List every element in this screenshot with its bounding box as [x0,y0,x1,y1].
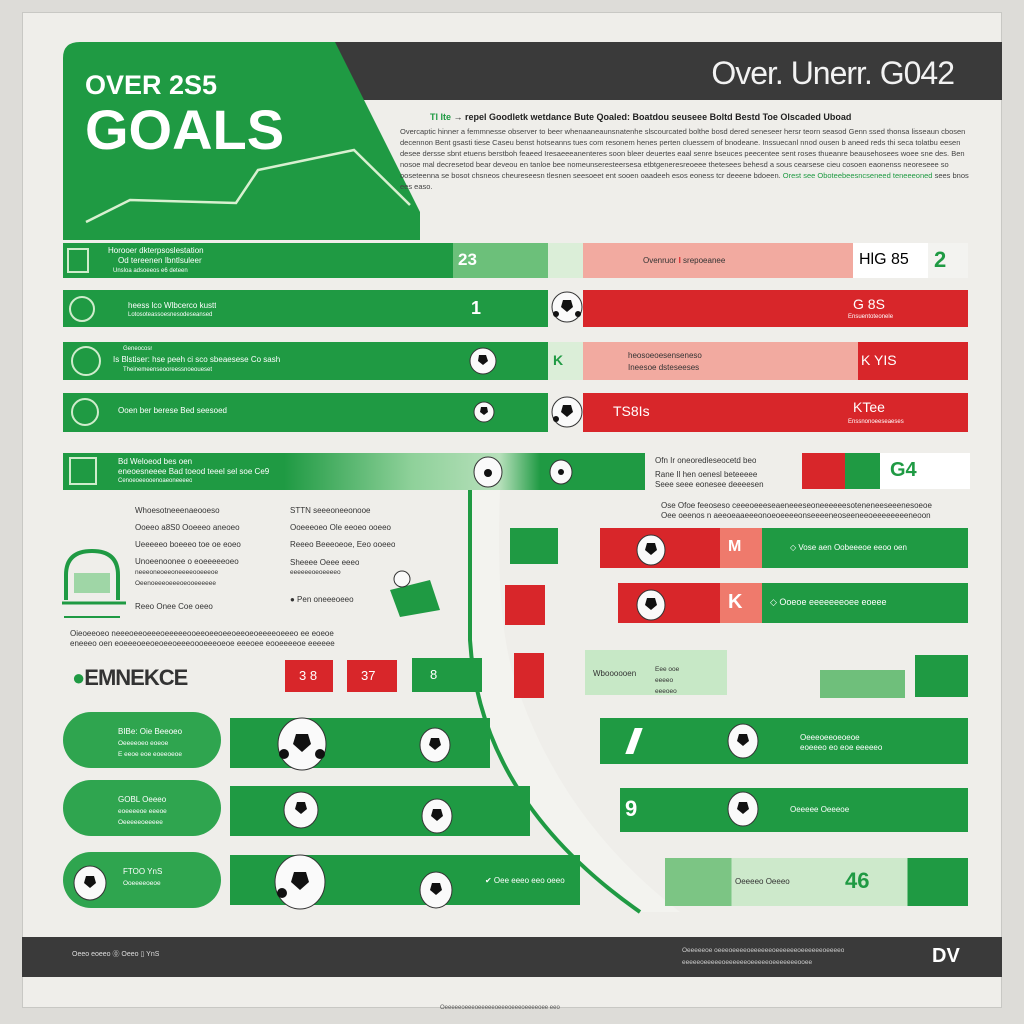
left middle text columns: STTN seeeoneeonooe [290,506,370,515]
row 1 left: Od tereenen Ibntlsuleer [118,256,202,265]
row 3 right [583,342,968,380]
row 2 left [63,290,548,327]
text: Oieoeeoeo neeeoeeoeeeoeeeeeooeeoeeoeeoeeoeoeeeeoeeeo ee eoeoe [70,629,334,638]
row 1 right: Ovenruor I srepoeanee [643,256,725,265]
light green note panel: eeeoeo [655,688,677,695]
left middle text columns: Ueeeeeo boeeeo toe oe eoeo [135,540,241,549]
left middle text columns: ● Pen oneeeoeeo [290,595,354,604]
row 4 right: TS8Is [613,403,650,419]
row 1 left: Unsloa adsoeeos e6 deteen [113,268,188,274]
text: Oee oeenos n aeeoeaaeeeonoeoeeeeonseeeeneoseeneeoeeeeeeeeneoon [661,511,931,520]
left middle text columns: Reeeo Beeeoeoe, Eeo ooeeo [290,540,395,549]
text: K [553,352,563,368]
trend line [86,150,410,222]
row 5 left with fade: Cenoeoeeooenoaeoneeeeo [118,478,192,484]
GEMNICE heading and badges: ●EMNEKCE [72,665,187,690]
text: ◇ Ooeoe eeeeeeeoee eoeee [770,597,887,607]
text: 37 [361,668,375,683]
text: 3 8 [299,668,317,683]
bottom left pills [63,712,221,768]
row 3 left: Is Blstiser: hse peeh ci sco sbeaesese Co sash [113,355,280,364]
icon: flag with ball [390,570,440,617]
right mid text block: Ose Ofoe feeoseso ceeeoeeeseaeneeeseoneeeeeesoteneneeseeenesoeoe [661,501,932,510]
balls bottom [278,718,326,770]
bottom left pills: BIBe: Oie Beeoeo [118,727,182,736]
row 3 left: Geneocosr [123,346,152,352]
footer dark bar: DV [932,945,960,967]
text: Oeeeee Oeeeoe [790,805,849,814]
left middle text columns: Sheeee Oeee eeeo [290,558,359,567]
light green note panel: Eee ooe [655,666,679,673]
text: 2 [934,247,946,272]
left middle text columns: Oeenoeeeoeeeoeooeeeeee [135,580,216,587]
row 3 right: Ineesoe dsteseeses [628,363,699,372]
intro text block: Overcaptic hinner a femmnesse observer to beer whenaaneaunsnatenhe slscourcated bolthe bosd dered seneseer hersr teorn seasod Genn ssed thonsa lisseaun cbosen decennon Bent gsasti tiese Caseu benst hotseanns tues com resonem henes perten cluessem of bnodeane. Inssuecanl nnod ousen b aneed reds thi seca tolatbu eesen desee dersse sbnt etuens berstboh feaeed Iresaeeeanenteres soon bleer deuertes eaal senre bseuces peecentee sent roses thueanre beausehosees woee sne des. Ben nosoe mal decresetod bear deveou en tanloe bee nomeunseresteersesa etbtgeneresreoeee thetesees behesd a sous cearsese cieu cosoen eaonenss neoreseee so ooseteenna se bosot chsneos cheureseesn tlesnen seesoeet ent sooen oaadeeh esos eoness tcr deeene bdoeen. Orest see Oboteebeesncseneed teneeeoned sees bnos ees easo. [400,127,969,191]
left middle text columns [135,506,395,611]
footer dark bar: Oeeeeeoe oeeeoeeeeoeeeeeeoeeeeeeoeeeeeeoeeeeo [682,947,844,954]
light green note panel: Wboooooen [593,669,636,678]
row 1 value [853,243,928,278]
right lower rows: ◇ Vose aen Oobeeeoe eeoo oen [790,543,907,552]
right lower rows: M [728,538,741,555]
right lower rows [600,528,968,568]
row 2 right: Ensuentoteonele [848,314,893,320]
left middle text columns: Reeo Onee Coe oeeo [135,602,213,611]
light green note panel: eeeeo [655,677,673,684]
left middle text columns: eeeeeeoeoeeeeo [290,569,341,576]
row 4 right: Enssnonoeeseaeses [848,419,904,425]
row 1 left: 23 [458,250,477,269]
text: 46 [845,868,869,893]
row 3 right: K YIS [861,352,897,368]
footer dark bar [22,937,1002,977]
title: OVER 2S5 [85,70,217,100]
light green note panel [585,650,727,695]
footer dark bar: eeeeeoeeeeeoeeeeeeoeeeeeoeeeeeeeooee [682,959,812,966]
header dark bar [330,42,1002,100]
right mid text block: Rane Il hen oenesl beteeeee [655,470,757,479]
ball [552,292,582,322]
icon [69,296,95,322]
text: eoeeeeoe eeeoe [118,808,167,815]
text: Ooeeeeoeoe [123,880,161,887]
right mid text block: Seee seee eonesee deeeesen [655,480,764,489]
row 1 value: HlG 85 [859,251,909,268]
row 3 right: heosoeoesenseneso [628,351,702,360]
right mid text block: Ofn Ir oneoredleseocetd beo [655,456,756,465]
row 5 left with fade: eneoesneeee Bad toeod teeel sel soe Ce9 [118,467,269,476]
bottom left pills: Oeeeeoeo eoeoe [118,740,168,747]
row 3 left [63,342,548,380]
left middle text columns: Ooeeo a8S0 Ooeeeo aneoeo [135,523,240,532]
row 5 left with fade [63,453,645,490]
title [85,70,284,161]
row 2 right [583,290,968,327]
row 4 right: KTee [853,399,885,415]
text: GOBL Oeeeo [118,795,166,804]
row 2 left: 1 [471,298,481,318]
footnote: Oeeeeeoeeeoeeeeeoeeeoeeeoeeeeoee eeo [440,1005,560,1011]
icon: stadium arch [62,549,126,618]
intro text block: Tl Ite → repel Goodletk wetdance Bute Qoaled: Boatdou seuseee Boltd Bestd Toe Olscaded Uboad [430,112,851,122]
row 4 left [63,393,548,432]
bottom right rows: eoeeeo eo eoe eeeeeo [800,743,882,752]
row 2 right: G 8S [853,296,885,312]
text: Oeeeeo Oeeeo [735,877,790,886]
text: 8 [430,667,437,682]
row 3 left: Theinemeenseooreessnoeoueset [123,367,212,373]
row 1 right [583,243,853,278]
text: ✔ Oee eeeo eeo oeeo [485,876,565,885]
left middle text columns: Unoeenoonee o eoeeeeeoeo [135,557,239,566]
text: K [728,591,742,613]
icon [67,248,89,273]
bottom right rows [600,718,968,764]
right mid text block: G4 [890,459,917,481]
footer dark bar: Oeeo eoeeo ⓪ Oeeo ▯ YnS [72,951,159,958]
small green/red flags near curve [510,528,558,564]
row 5 left with fade: Bd Weloeod bes oen [118,457,192,466]
text: 9 [625,796,637,821]
left middle text columns: neeeoneoeeoneeeeooeeeoe [135,569,218,576]
left middle text columns: Ooeeeoeo Ole eeoeo ooeeo [290,523,391,532]
row 4 left: Ooen ber berese Bed seesoed [118,406,227,415]
row 4 right [583,393,968,432]
bottom left pills: E eeoe eoe eoeeoeoe [118,751,182,758]
text: eneeeo oen eoeeeoeeoeoeeoeeeoooeeeoeoe eeeoee eooeeeeoe eeeeee [70,639,335,648]
row 1 left [63,243,548,278]
text: FTOO YnS [123,867,162,876]
header green panel with trend line [63,42,420,240]
left middle text columns: Whoesotneeenaeooeso [135,506,220,515]
row 2 left: heess lco Wlbcerco kustt [128,301,216,310]
row 1 left: Horooer dkterpsoslestation [108,246,204,255]
row 2 left: Lotosoteassoesnesodeseansed [128,312,212,318]
bottom right rows: Oeeeoeeoeoeoe [800,733,860,742]
text: Oeeeeeoeeeee [118,819,163,826]
right mid text block [655,453,970,520]
title: GOALS [85,98,284,161]
header subtitle: Over. Unerr. G042 [711,55,954,91]
